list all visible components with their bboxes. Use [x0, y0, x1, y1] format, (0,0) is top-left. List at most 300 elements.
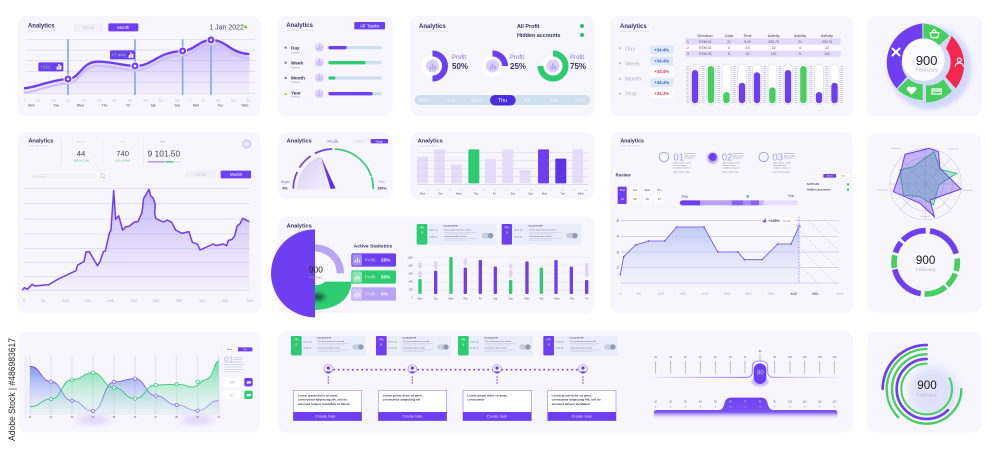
- period labels: Month: [625, 76, 641, 82]
- schedule card 4: Pick up documents from a friend: [570, 340, 596, 343]
- range slider: 120: [818, 402, 822, 404]
- x axis labels: 450: [812, 291, 819, 296]
- search box: Go to search: [32, 175, 46, 178]
- step 03: dolore magna aliqua: [773, 172, 791, 174]
- range slider: 30: [684, 402, 687, 404]
- panel: segmented ring menu: [867, 16, 982, 116]
- schedule card 3: [458, 336, 533, 356]
- line chart with projection: 3: [616, 249, 619, 254]
- capsule bars: [688, 64, 842, 105]
- step 01: dolore magna aliqua: [673, 172, 691, 174]
- schedule card purple: Yesterday 09:21 PM: [528, 225, 543, 228]
- watermark id: Adobe Stock | #486983617: [7, 338, 17, 441]
- step 02 selected: incididunt ut labore et: [722, 167, 740, 170]
- week and month tabs: [352, 139, 388, 143]
- x axis labels: [417, 184, 588, 196]
- gauge needle: [321, 157, 336, 189]
- panel background: [610, 16, 853, 116]
- legend toggles: Hidden accounts: [517, 33, 560, 39]
- heading: Analytics: [287, 138, 312, 144]
- callout +311: [38, 62, 63, 71]
- x axis labels: 500: [247, 298, 254, 303]
- donut 50%: 50%: [452, 62, 468, 71]
- row: month: Month: [291, 75, 305, 80]
- stat: 44: Approved: [77, 140, 85, 143]
- x axis labels: Mon: [420, 192, 426, 196]
- x axis labels: 09: [196, 417, 200, 419]
- schedule card purple: [502, 224, 582, 245]
- legend toggles: All Profit: [517, 24, 540, 30]
- percent badges: +34.4%: [654, 69, 669, 74]
- tick slider: [648, 351, 840, 386]
- date tiles: Wed: [645, 188, 651, 192]
- step 02 selected: eiusmod tempor: [722, 164, 736, 167]
- tabs: Month: [227, 348, 232, 351]
- step 02 selected: 02: [722, 152, 732, 163]
- x axis labels: 150: [85, 298, 92, 303]
- tick slider: 20: [669, 357, 673, 359]
- timeline: [324, 365, 587, 384]
- task box 3: [463, 390, 531, 421]
- pro label: [377, 180, 387, 190]
- pie chart: 900: [309, 265, 323, 275]
- value box 100: [223, 378, 253, 387]
- data table: 100: [771, 52, 777, 56]
- heading: Lorem ipsum dolor: [28, 145, 48, 148]
- callout +7.44%: +7.44%: [111, 53, 126, 58]
- x axis labels: Tue: [560, 192, 565, 196]
- stat: 740: +311 (+3.44%): [115, 160, 131, 162]
- x axis labels: 50: [202, 98, 205, 102]
- data table: ITEM 02: [699, 46, 712, 50]
- x axis labels: 100: [437, 190, 441, 192]
- heading: Analytics: [418, 138, 443, 144]
- range slider: 110: [803, 402, 807, 404]
- stacked bar chart: [407, 257, 590, 300]
- heading: Analytics: [28, 138, 53, 144]
- data table: 9:00: [744, 40, 751, 44]
- panel background: [867, 16, 982, 116]
- x axis labels: 200: [460, 190, 464, 192]
- stat: 740: [115, 141, 131, 162]
- toggle tabs: Month: [827, 175, 832, 178]
- stacked bar chart: Sat: [493, 297, 498, 300]
- panel background: [278, 217, 594, 313]
- x axis labels: 10: [217, 417, 221, 419]
- tick slider: 60: [729, 357, 732, 359]
- stacked bar chart: Mon: [418, 297, 423, 300]
- x axis labels: Sat: [511, 192, 515, 196]
- x axis labels: 0: [189, 98, 191, 102]
- heading: Analytics: [287, 224, 312, 230]
- stacked bar chart: 0: [411, 298, 413, 300]
- radar chart: Position 04: [920, 215, 931, 218]
- task box 2: Lorem ipsum dolor sit amet,: [383, 394, 423, 398]
- step 01: dolor sit amet,: [684, 154, 696, 157]
- callout +105%: +105%: [768, 219, 781, 223]
- stat button 0%: [351, 287, 396, 301]
- week and month tabs: Month: [376, 139, 384, 143]
- tick slider: 50: [714, 357, 717, 359]
- callout +311: +311: [40, 65, 51, 70]
- stat: profit total: Profit: [160, 140, 165, 143]
- ring centre value: [902, 38, 945, 81]
- schedule card 3: 9: [462, 342, 464, 346]
- date tiles: 25: [634, 197, 637, 201]
- tick slider: 10: [654, 357, 658, 359]
- x axis labels: 0: [539, 190, 541, 192]
- bars: [417, 149, 588, 184]
- stat: 44: [73, 140, 89, 162]
- schedule card 3: 11:40 am: [470, 348, 479, 350]
- side note: [224, 354, 245, 372]
- all tasks button: All Tasks: [360, 23, 380, 29]
- weekday selector: Mon: [419, 98, 429, 104]
- x axis labels: [24, 98, 251, 107]
- schedule card 3: Lorem ipsum dolor sit amet: [485, 347, 507, 350]
- percent badges: +34.4%: [654, 58, 669, 63]
- x axis labels: 150: [679, 291, 686, 296]
- green lower left segment: [897, 79, 923, 100]
- data table: 100: [824, 52, 830, 56]
- schedule card purple: 10:21 am: [514, 230, 523, 232]
- data table: 4: [728, 46, 730, 50]
- x axis labels: 02: [50, 417, 53, 419]
- data table: 5: [728, 52, 730, 56]
- x axis labels: 01: [29, 417, 32, 419]
- green lower right segment: [926, 79, 952, 103]
- schedule card 2: 11:40 am: [388, 348, 397, 350]
- weekday selector: Wed: [471, 98, 482, 104]
- stacked bar chart: 400: [409, 282, 413, 284]
- radar chart: Position 03: [962, 189, 973, 192]
- icon: cross tools: [892, 48, 900, 56]
- row: month: Analytics: [291, 81, 301, 84]
- x axis labels: [619, 291, 844, 296]
- ring centre value: February: [915, 67, 938, 73]
- schedule card 2: Yesterday 09:21 PM: [402, 337, 417, 340]
- tabs: [222, 347, 252, 351]
- data table: 22: [825, 46, 829, 50]
- panel background: [19, 332, 260, 432]
- stacked bar chart: Thu: [463, 297, 468, 300]
- task box 1: eiusmod tempor incididunt ut labore: [298, 402, 350, 406]
- schedule card green: [417, 224, 497, 245]
- x axis labels: 200: [701, 291, 709, 296]
- x axis labels: 450: [516, 190, 521, 192]
- task box 2: [378, 390, 447, 421]
- step 01: 01: [673, 152, 684, 163]
- heading: Analytics: [419, 24, 446, 30]
- stacked bar chart: Wed: [554, 297, 560, 300]
- x axis labels: 50: [426, 190, 429, 192]
- date tiles: Thu: [657, 188, 662, 192]
- schedule card 4: [543, 336, 618, 356]
- area chart: [30, 361, 219, 415]
- x axis labels: Sat: [150, 103, 156, 107]
- data table: [685, 34, 841, 57]
- panel background: [867, 133, 981, 313]
- task box 1: [293, 390, 362, 421]
- week and month tabs: Month: [117, 25, 130, 30]
- stat button 25%: [351, 253, 396, 267]
- panel background: [867, 332, 981, 433]
- x axis labels: 350: [767, 291, 775, 296]
- x axis labels: 0: [619, 291, 622, 296]
- data table: 209.75: [768, 40, 779, 44]
- range slider: 50: [714, 402, 717, 404]
- begin label: Begin: [281, 180, 290, 184]
- schedule card 3: Yesterday 09:21 PM: [484, 337, 499, 340]
- x axis labels: Wed: [77, 103, 84, 107]
- data table: 5: [799, 52, 801, 56]
- date tiles: [618, 187, 664, 204]
- x axis labels: 350: [494, 190, 498, 192]
- schedule card 4: Yesterday 09:21 PM: [569, 337, 584, 340]
- step 01: Lorem ipsum: [684, 153, 695, 155]
- tabs: Year: [243, 348, 247, 351]
- percent badges: +34.4%: [654, 80, 669, 85]
- donut 25%: [480, 54, 526, 78]
- panel: weekly bar chart: [410, 132, 594, 199]
- row: day: Day: [291, 45, 300, 50]
- stat: 740: Views: [120, 141, 125, 143]
- data table: 20: [746, 52, 749, 56]
- data table: 4: [799, 46, 801, 50]
- tick slider: 110: [803, 357, 807, 359]
- stacked bar chart: 800: [409, 265, 413, 267]
- tick slider: 120: [818, 357, 822, 359]
- data table: 21: [798, 40, 802, 44]
- schedule card green: 11:40 am: [429, 237, 438, 239]
- pie chart: [271, 229, 352, 317]
- donut 25%: 25%: [510, 62, 526, 71]
- x axis labels: 04: [92, 417, 95, 419]
- schedule card green: FRI: [420, 226, 424, 230]
- schedule card purple: FRI: [505, 226, 509, 230]
- schedule card 1: 10:21 am: [303, 342, 312, 344]
- task box 1: consectetur adipiscing elit, sed do: [298, 398, 347, 402]
- task box 3: Lorem ipsum dolor sit amet,: [467, 394, 507, 398]
- x axis labels: Tue: [438, 192, 443, 196]
- period labels: Year: [625, 92, 637, 98]
- legend toggles: [517, 24, 584, 39]
- x axis labels: 350: [128, 98, 133, 102]
- stacked bar chart: Fri: [479, 297, 482, 300]
- schedule card 2: [376, 336, 451, 356]
- blue glow: [908, 367, 958, 417]
- begin label: 0%: [282, 186, 288, 190]
- step 01: incididunt ut labore et: [673, 167, 691, 170]
- area chart: [24, 36, 249, 95]
- x axis labels: 0: [24, 98, 26, 102]
- panel: area line chart top left: [17, 16, 261, 116]
- range slider: [654, 398, 837, 418]
- stacked bar chart: 200: [409, 290, 413, 292]
- x axis labels: 200: [107, 298, 115, 303]
- donut 50%: Profit: [452, 55, 466, 61]
- x axis labels: [23, 298, 254, 303]
- data table: Activity: [768, 34, 780, 38]
- radar chart: Position 01: [891, 147, 901, 150]
- range slider: 100: [788, 402, 793, 404]
- panel: tasks progress list: [278, 16, 393, 116]
- heading: [418, 138, 443, 148]
- x axis labels: 250: [724, 291, 731, 296]
- panel: profit gauge: [278, 132, 393, 229]
- step 02 selected: Lorem ipsum: [733, 153, 744, 155]
- task box 4: [548, 390, 616, 421]
- x axis labels: 150: [231, 98, 236, 102]
- date: 1 Jan 2022: [209, 25, 244, 32]
- schedule card green: Yesterday 09:21 PM: [443, 225, 458, 228]
- schedule card 1: [291, 336, 366, 356]
- panel: table and vertical capsule bars: [610, 16, 853, 116]
- stacked bar chart: Wed: [448, 297, 454, 300]
- date tiles: 24: [621, 197, 624, 201]
- search box: [28, 171, 108, 182]
- step 03: adipiscing elit, sed do: [773, 161, 790, 164]
- range slider: 80: [759, 402, 762, 404]
- heading: [28, 138, 53, 148]
- x axis labels: 100: [216, 98, 221, 102]
- weekday selector: Tue: [446, 98, 456, 104]
- heading: [620, 138, 644, 148]
- task box 3: consectetur: [467, 398, 485, 402]
- heading: Lorem ipsum dolor sit amet: [28, 30, 56, 33]
- callout +7.44%: [110, 50, 135, 59]
- x axis labels: 300: [112, 98, 117, 102]
- schedule card 3: Pick up documents from a friend: [485, 340, 511, 343]
- heading: Analytics: [28, 24, 55, 30]
- step 03: eiusmod tempor: [773, 164, 786, 167]
- range slider: 130: [832, 402, 837, 404]
- data table: 3.5: [745, 46, 750, 50]
- panel: task timeline and sliders: [278, 331, 853, 433]
- segmented donut: [894, 231, 957, 294]
- step 03: Lorem ipsum: [784, 153, 795, 155]
- line chart with projection: [616, 217, 839, 283]
- panel background: [278, 331, 853, 433]
- stat: 740: 740: [116, 149, 129, 158]
- sliders: [648, 351, 840, 418]
- schedule card green: Pick up documents from a friend: [444, 229, 471, 232]
- week and month tabs: Week: [83, 25, 95, 30]
- stacked bar chart: Mon: [525, 297, 530, 300]
- review heading: Review: [616, 172, 631, 177]
- data table: Code: [724, 34, 734, 38]
- weekday selector: [414, 95, 590, 106]
- pro label: 100%: [377, 186, 387, 190]
- schedule card 1: Lorem ipsum dolor sit amet: [318, 347, 340, 350]
- step 03: 03: [772, 152, 783, 163]
- x axis labels: 200: [584, 190, 588, 192]
- icon: avatar: [242, 139, 251, 149]
- range slider: 60: [729, 402, 732, 404]
- x axis labels: Wed: [456, 192, 462, 196]
- radar chart: Position 02: [948, 147, 958, 150]
- begin label: [281, 180, 290, 190]
- x axis labels: 200: [246, 98, 251, 102]
- glow under chart: [76, 416, 214, 423]
- data table: Activity: [794, 34, 806, 38]
- donut centre value: 900: [916, 254, 936, 267]
- task box 4: Create task: [571, 414, 592, 419]
- day to year range bar: Year: [788, 194, 795, 198]
- step 01: eiusmod tempor: [673, 164, 687, 167]
- data table: Activity: [821, 34, 833, 38]
- schedule card 3: FRI: [461, 337, 466, 341]
- value box 10: [223, 391, 253, 399]
- data table: 22: [772, 46, 776, 50]
- heading: Lorem ipsum dolor: [418, 145, 437, 148]
- x axis labels: 250: [130, 298, 138, 303]
- schedule card 2: Pick up documents from a friend: [403, 340, 429, 343]
- callout +105%: Profit: [783, 219, 790, 223]
- weekday selector: Sat: [550, 98, 559, 104]
- x axis labels: 300: [153, 298, 160, 303]
- tick slider: 40: [699, 357, 702, 359]
- data table: 3: [687, 52, 689, 56]
- x axis labels: 0: [23, 298, 26, 303]
- heading: Analytics: [620, 24, 647, 30]
- x axis labels: Sun: [528, 192, 534, 196]
- row: year: [284, 89, 382, 99]
- schedule card purple: 9: [506, 231, 508, 235]
- heading: Analytics: [286, 23, 314, 29]
- x axis labels: Mon: [542, 192, 547, 196]
- ring centre value: [917, 379, 937, 398]
- side note: 01: [224, 354, 234, 364]
- stat button 50%: [351, 270, 396, 284]
- panel background: [610, 132, 853, 313]
- step 02 selected: dolore magna aliqua: [722, 172, 740, 174]
- x axis labels: Tue: [53, 103, 59, 107]
- x axis labels: 400: [505, 190, 509, 192]
- data table: 1: [687, 40, 689, 44]
- line chart with projection: 4: [616, 234, 619, 239]
- panel background: [278, 132, 393, 199]
- icon: person: [955, 58, 963, 67]
- range slider: 10: [654, 402, 658, 404]
- schedule card purple: 11:40 am: [514, 237, 523, 239]
- heading: Lorem ipsum dolor: [620, 145, 640, 148]
- schedule card 1: Pick up documents from a friend: [318, 340, 344, 343]
- pie chart: February: [309, 275, 323, 279]
- x axis labels: 150: [66, 98, 71, 102]
- pro label: Pro: [379, 180, 385, 184]
- panel background: [17, 16, 261, 116]
- x axis labels: Mon: [193, 103, 199, 107]
- stat button 50%: Profit: [365, 275, 376, 280]
- x axis labels: 100: [561, 190, 565, 192]
- stacked bar chart: Tue: [434, 297, 438, 300]
- step 02 selected: consectetur: [733, 157, 743, 160]
- heading: Analytics: [620, 138, 644, 144]
- x axis labels: 500: [530, 190, 534, 192]
- week and month tabs: [74, 23, 138, 32]
- data table: Time: [743, 34, 752, 38]
- x axis labels: 150: [448, 190, 453, 192]
- legend: [807, 182, 849, 192]
- heading: [286, 23, 315, 32]
- legend: Hidden accounts: [807, 188, 831, 192]
- stat: 44: +961 (+1.21%): [73, 160, 89, 162]
- x axis labels: 50: [636, 291, 642, 296]
- step 03: incididunt ut labore et: [773, 167, 791, 170]
- panel background: [410, 132, 594, 199]
- row: day: Analytics: [291, 51, 301, 54]
